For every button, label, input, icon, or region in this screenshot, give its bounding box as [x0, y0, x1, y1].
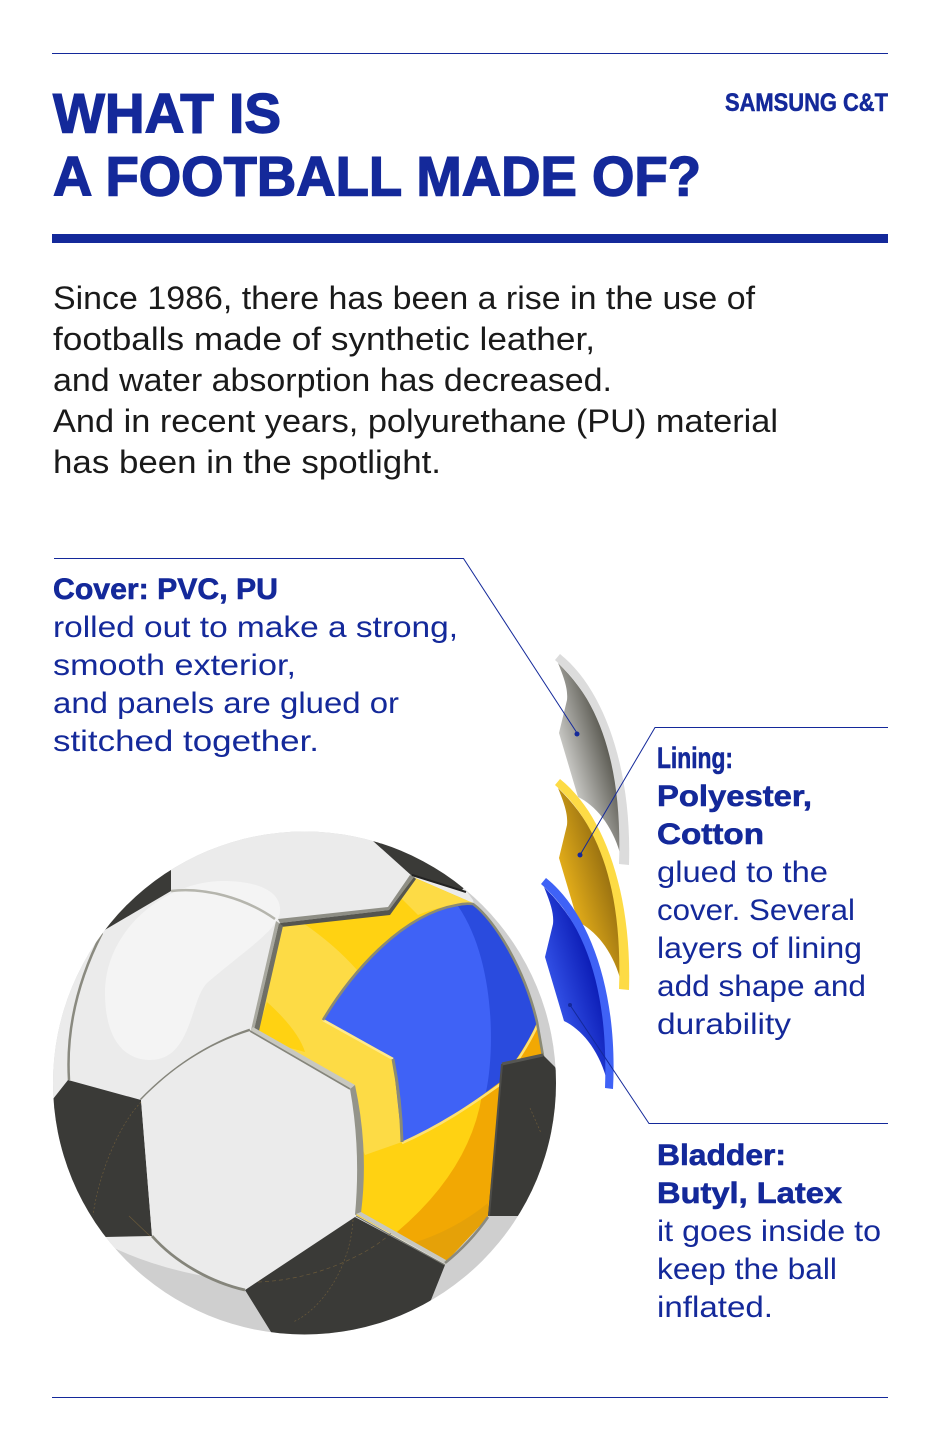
- left black panel: [54, 1080, 152, 1237]
- yellow lining section: [258, 877, 543, 1263]
- leader line: bladder: [568, 1003, 888, 1124]
- label: lining: [657, 742, 866, 1041]
- top black patches: [105, 870, 171, 930]
- cover layer piece (gray): [555, 654, 629, 865]
- label: bladder: it goes inside to: [657, 1215, 881, 1248]
- label: lining: Cotton: [657, 818, 764, 851]
- bottom black panel: [245, 1217, 445, 1345]
- label: cover: rolled out to make a strong,: [53, 611, 458, 644]
- central hexagon panel: [141, 1031, 262, 1290]
- intro text: And in recent years, polyurethane (PU) material: [53, 403, 778, 439]
- title: WHAT IS: [53, 82, 281, 144]
- label: cover: and panels are glued or: [53, 687, 399, 720]
- leader line: cover: [54, 558, 580, 736]
- label: lining: cover. Several: [657, 894, 855, 927]
- label: lining: Polyester,: [657, 780, 812, 813]
- intro text: has been in the spotlight.: [53, 444, 441, 480]
- intro text: footballs made of synthetic leather,: [53, 321, 595, 357]
- title: [53, 82, 701, 208]
- label: lining: durability: [657, 1008, 791, 1041]
- label: bladder: inflated.: [657, 1291, 773, 1324]
- label: cover: smooth exterior,: [53, 649, 296, 682]
- leader line: lining: [578, 728, 888, 858]
- intro text: and water absorption has decreased.: [53, 362, 612, 398]
- label: lining: layers of lining: [657, 932, 862, 965]
- label: bladder: keep the ball: [657, 1253, 837, 1286]
- label: lining: add shape and: [657, 970, 866, 1003]
- bladder layer piece (blue): [541, 878, 614, 1089]
- highlight on upper-left panel: [105, 881, 280, 1060]
- title: A FOOTBALL MADE OF?: [53, 144, 701, 208]
- brand logo text: SAMSUNG C&T: [725, 89, 888, 117]
- football illustration: [53, 832, 556, 1334]
- intro text: Since 1986, there has been a rise in the use of: [53, 280, 755, 316]
- label: lining: glued to the: [657, 856, 828, 889]
- lining layer piece (yellow): [555, 779, 629, 990]
- label: bladder: Bladder:: [657, 1139, 786, 1172]
- top panel seam: [278, 875, 414, 923]
- label: cover: stitched together.: [53, 725, 319, 758]
- intro text: [53, 280, 778, 480]
- blue bladder section: [323, 904, 543, 1143]
- label: lining: Lining:: [657, 742, 733, 775]
- label: bladder: [657, 1139, 881, 1324]
- right black panel: [488, 1055, 556, 1216]
- label: cover: Cover: PVC, PU: [53, 573, 278, 606]
- label: bladder: Butyl, Latex: [657, 1177, 842, 1210]
- upper-left seams: [171, 890, 275, 919]
- label: cover: [53, 573, 458, 758]
